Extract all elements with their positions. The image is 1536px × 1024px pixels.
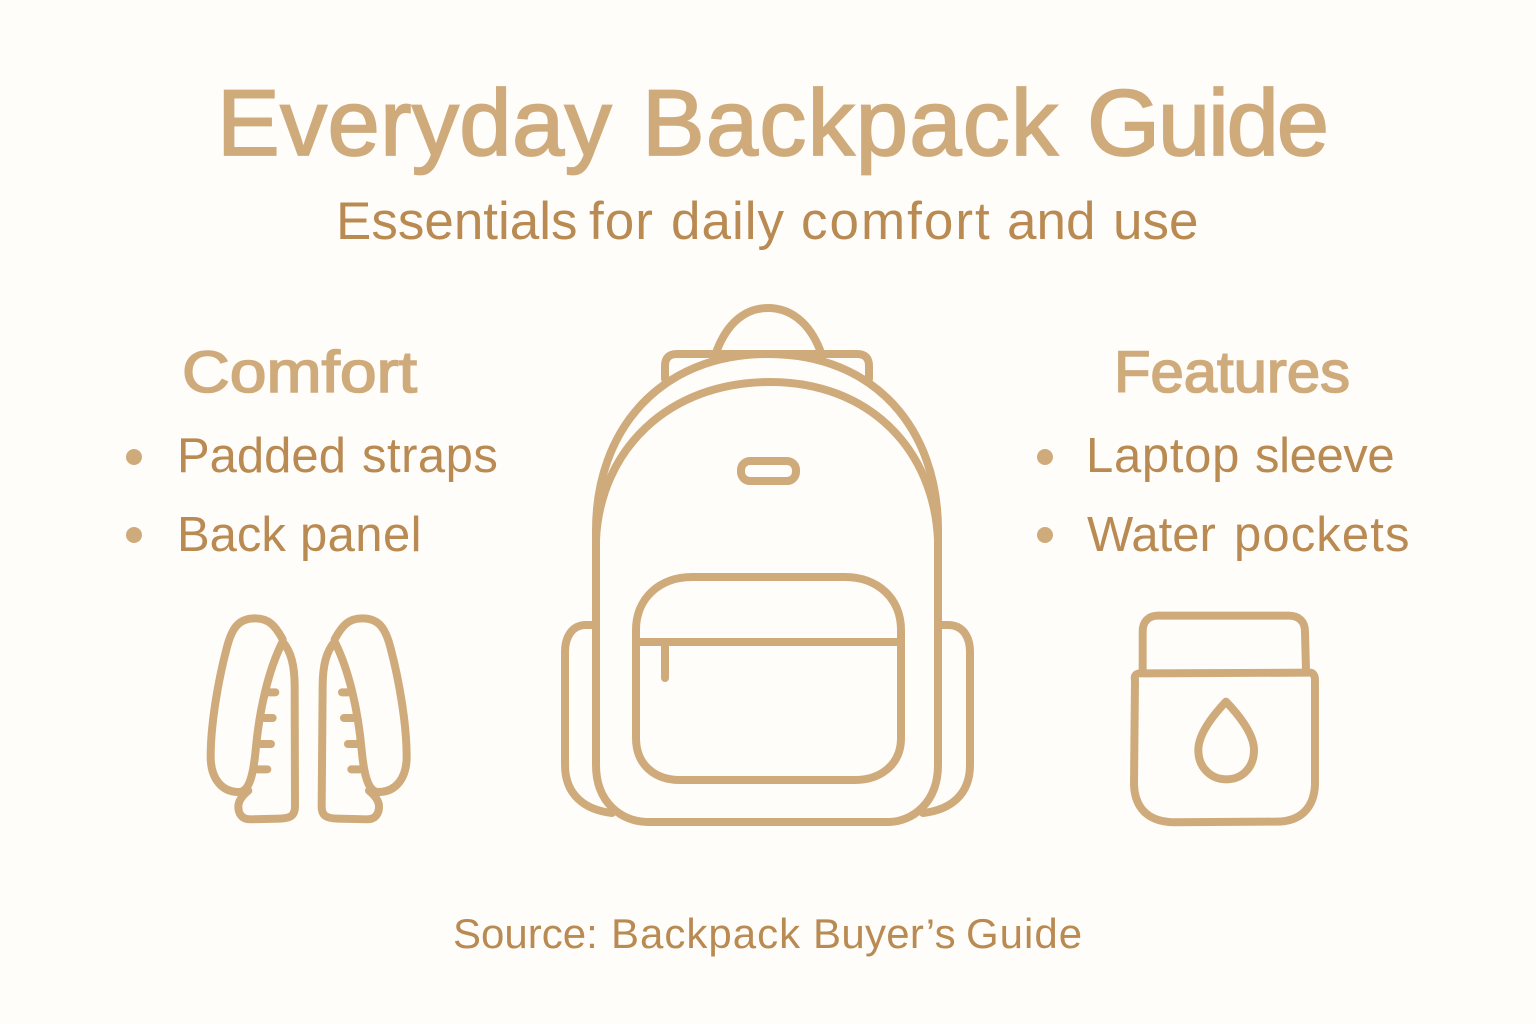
bullet list: features: Laptop bbox=[1086, 429, 1240, 483]
backpack inner arc bbox=[596, 382, 938, 540]
illustration: backpack bbox=[565, 308, 970, 822]
subtitle: use bbox=[1113, 192, 1198, 251]
title: Everyday bbox=[217, 70, 612, 175]
panel: features bbox=[1037, 340, 1411, 822]
panel: comfort bbox=[126, 340, 498, 819]
icon: laptop sleeve with water drop bbox=[1134, 616, 1315, 822]
left side pocket bbox=[565, 625, 612, 813]
bullet list: comfort: Padded bbox=[177, 429, 346, 483]
bullet list: comfort: Back bbox=[177, 508, 286, 562]
subtitle: for bbox=[589, 192, 654, 251]
zipper pull bbox=[661, 642, 669, 678]
grab slot bbox=[741, 461, 796, 481]
backpack top strap mount bbox=[665, 354, 869, 379]
title: Backpack bbox=[642, 70, 1059, 175]
icon: padded shoulder straps bbox=[211, 618, 407, 819]
source note: Source: bbox=[453, 910, 598, 957]
source note: Guide bbox=[966, 910, 1083, 957]
subtitle: daily bbox=[671, 192, 785, 251]
bullet list: features: sleeve bbox=[1255, 429, 1394, 483]
bullet list: features: Water bbox=[1087, 508, 1216, 562]
source note: Buyer’s bbox=[813, 910, 956, 957]
heading: features: Features bbox=[1114, 340, 1350, 405]
subtitle: and bbox=[1007, 192, 1095, 251]
bullet list: comfort bbox=[126, 429, 498, 562]
subtitle: Essentials bbox=[336, 192, 578, 251]
backpack handle bbox=[717, 308, 820, 350]
bullet list: features: pockets bbox=[1234, 508, 1411, 562]
right side pocket bbox=[923, 625, 970, 813]
subtitle: comfort bbox=[801, 192, 992, 251]
heading: comfort: Comfort bbox=[182, 340, 417, 405]
pocket zipper line bbox=[636, 638, 901, 646]
source note: Backpack bbox=[611, 910, 801, 957]
backpack body outer bbox=[596, 354, 938, 822]
bullet list: comfort: panel bbox=[300, 508, 422, 562]
bullet list: features bbox=[1037, 429, 1411, 562]
title: Guide bbox=[1087, 70, 1327, 175]
front pocket bbox=[636, 577, 901, 780]
bullet list: comfort: straps bbox=[362, 429, 498, 483]
